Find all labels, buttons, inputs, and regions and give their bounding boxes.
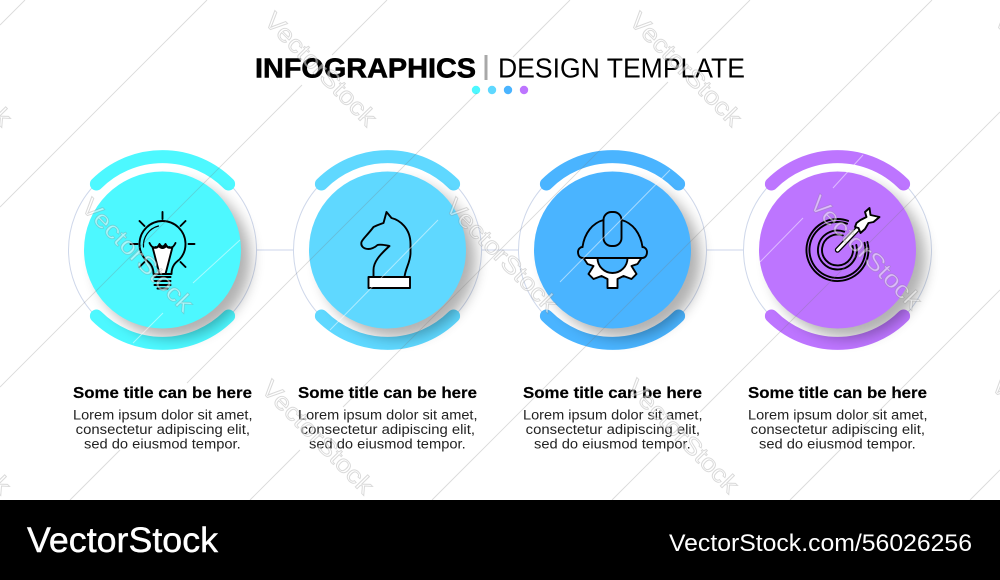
body 3: consectetur adipiscing elit, [526,422,700,437]
body 3: sed do eiusmod tempor. [534,437,691,452]
watermark text: VectorStock [624,7,748,133]
footer logotype: VectorStock [27,521,219,560]
body 4 [748,407,928,452]
body 4: sed do eiusmod tempor. [759,437,916,452]
watermark highlights on discs [133,155,863,343]
watermark text: VectorStock [440,193,564,319]
disc shadow 1 [95,182,251,338]
icon: chess knight [361,212,410,288]
watermark text: VectorStock [804,190,928,316]
disc shadow 2 [320,182,476,338]
disc shadow 3 [545,182,701,338]
top arc 1 [96,157,229,184]
body 3: Lorem ipsum dolor sit amet, [523,407,702,422]
panel: step 2 strategy [294,156,482,344]
text block 4 [748,385,928,452]
body 2 [298,407,478,452]
heading 2: Some title can be here [298,385,477,402]
title divider [484,55,488,80]
body 2: sed do eiusmod tempor. [309,437,466,452]
outer thin ring 1 [68,156,256,344]
body 2: Lorem ipsum dolor sit amet, [298,407,478,422]
panel: step 4 target [744,156,932,344]
body 4: Lorem ipsum dolor sit amet, [748,407,928,422]
outer thin ring 4 [744,156,932,344]
body 1: sed do eiusmod tempor. [84,437,241,452]
body 3 [523,407,702,452]
text block 2 [298,385,478,452]
disc 1 [84,172,241,328]
heading 1: Some title can be here [73,385,252,402]
body 1: consectetur adipiscing elit, [76,422,250,437]
text block 1 [73,385,252,452]
disc 2 [309,172,466,328]
text block 3 [523,385,702,452]
watermark text: VectorStock [76,193,200,319]
disc 4 [759,172,916,328]
icon: light bulb [130,212,194,288]
bottom arc 1 [96,316,229,343]
panel: step 3 engineering [518,156,706,344]
icon: hard hat and gear [578,212,647,288]
title colour dots [472,86,528,94]
footer url: VectorStock.com/56026256 [669,530,972,557]
body 2: consectetur adipiscing elit, [301,422,475,437]
heading 3: Some title can be here [523,385,702,402]
body 1 [73,407,252,452]
body 1: Lorem ipsum dolor sit amet, [73,407,252,422]
top arc 2 [321,157,454,184]
bottom arc 2 [321,316,454,343]
watermark text: VectorStock [256,375,380,501]
panel: step 1 idea [68,156,256,344]
top arc 4 [771,157,904,184]
bottom arc 3 [546,316,679,343]
footer bar [0,500,1000,580]
disc shadow 4 [770,182,926,338]
outer thin ring 3 [518,156,706,344]
title regular words: DESIGN TEMPLATE [498,52,745,84]
bottom arc 4 [771,316,904,343]
watermark text: VectorStock [259,7,383,133]
connector lines between rings [256,249,744,251]
body 4: consectetur adipiscing elit, [751,422,925,437]
watermark text: VectorStock [621,374,745,500]
title header [255,52,745,94]
icon: target and arrow [806,208,880,281]
outer thin ring 2 [294,156,482,344]
title bold word: INFOGRAPHICS [255,52,476,84]
top arc 3 [546,157,679,184]
heading 4: Some title can be here [748,385,927,402]
disc 3 [534,172,691,328]
